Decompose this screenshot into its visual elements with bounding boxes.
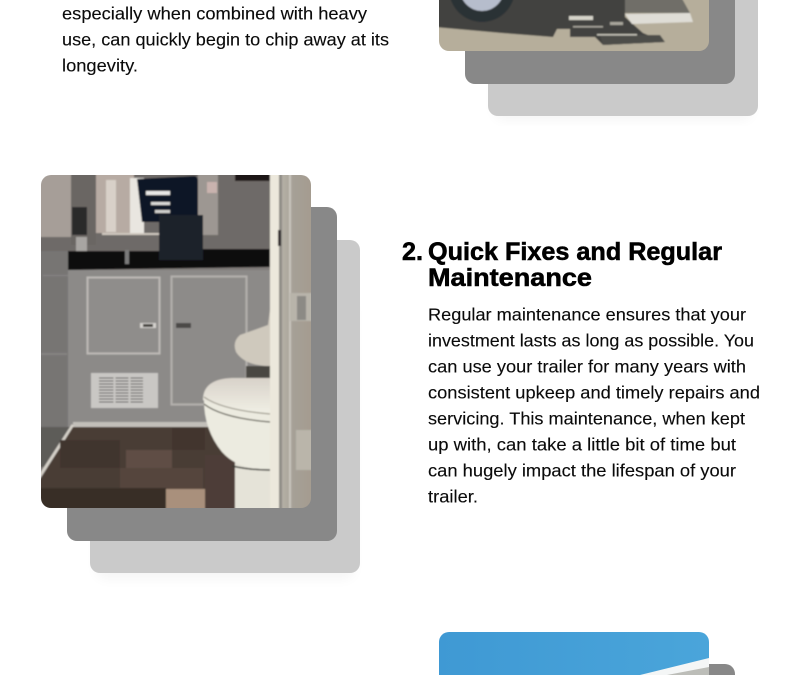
marble floor bbox=[41, 426, 224, 490]
section 2: heading bbox=[402, 238, 722, 292]
light grey backing card bbox=[488, 0, 758, 116]
photo: trailer roof and blue sky bbox=[439, 632, 709, 675]
section 2: body text: consistent upkeep and timely repairs and bbox=[428, 382, 760, 402]
section 2: body text: servicing. This maintenance, when kept bbox=[428, 408, 745, 428]
photo: trailer wheel on gravel bbox=[439, 0, 709, 51]
section 3: stacked photo of trailer against sky bbox=[439, 632, 735, 675]
door edge and aluminium panel bbox=[268, 175, 311, 508]
section 2: stacked photo of restroom bbox=[36, 170, 360, 579]
section 1: closing paragraph bbox=[62, 4, 389, 76]
wall vent bbox=[91, 373, 158, 408]
section 1: stacked photo of trailer bbox=[435, 0, 758, 120]
cabinet door right bbox=[172, 276, 246, 404]
section 2: body text: investment lasts as long as possible. You bbox=[428, 330, 754, 350]
dark grey backing card bbox=[465, 664, 735, 675]
dark grey backing card bbox=[67, 207, 337, 541]
section 2: body text: Regular maintenance ensures that your bbox=[428, 304, 746, 324]
dark grey backing card bbox=[465, 0, 735, 84]
section 2: heading: 2. bbox=[402, 238, 423, 266]
urinal bbox=[235, 310, 270, 366]
photo: restroom interior bbox=[36, 170, 316, 515]
mirror wall bbox=[36, 170, 271, 251]
section 2: body text: up with, can take a little bit of time but bbox=[428, 434, 736, 454]
vanity counter bbox=[67, 249, 270, 270]
section 2: body text bbox=[428, 304, 760, 506]
section 2: body text: can use your trailer for many years with bbox=[428, 356, 746, 376]
light grey backing card bbox=[90, 240, 360, 573]
section 1: closing paragraph: especially when combined with heavy bbox=[62, 4, 367, 24]
section 1: closing paragraph: longevity. bbox=[62, 56, 138, 76]
section 2: body text: trailer. bbox=[428, 486, 478, 506]
cabinet front bbox=[68, 270, 270, 427]
baseboard bbox=[73, 422, 270, 427]
section 2: heading: Quick Fixes and Regular bbox=[428, 238, 722, 266]
cabinet door left bbox=[88, 278, 160, 354]
section 2: heading: Maintenance bbox=[428, 264, 592, 292]
section 2: body text: can hugely impact the lifespan of your bbox=[428, 460, 736, 480]
section 1: closing paragraph: use, can quickly begin to chip away at its bbox=[62, 30, 389, 50]
toilet bbox=[203, 378, 270, 515]
